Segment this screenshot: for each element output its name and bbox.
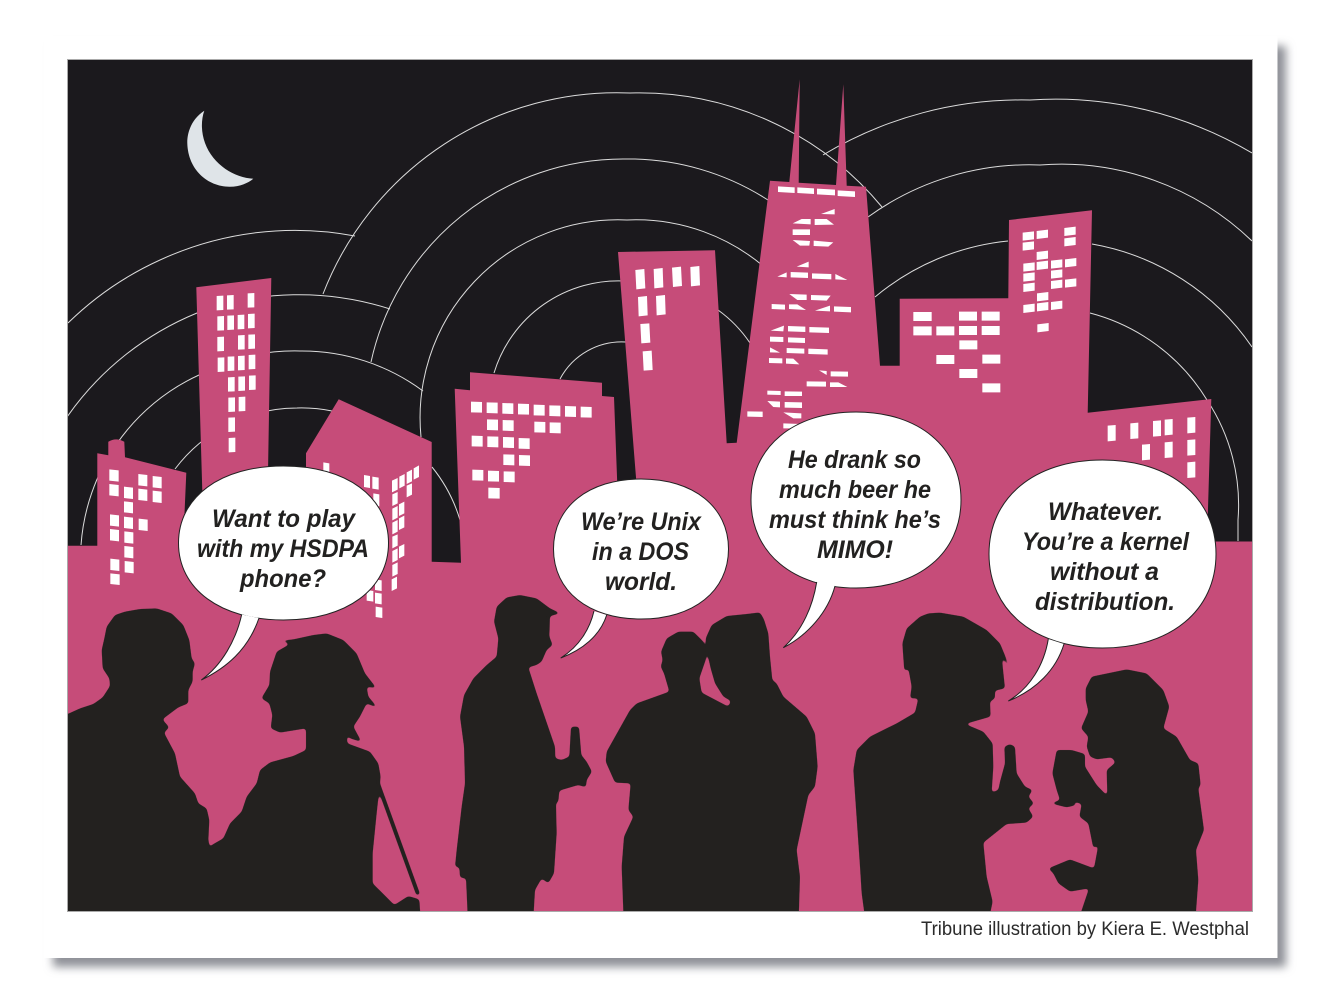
speech bubble: kernel: without a xyxy=(1050,558,1159,586)
silhouettes: two men xyxy=(606,612,818,930)
moon xyxy=(187,111,253,187)
speech bubble: MIMO: much beer he xyxy=(779,476,931,504)
windows: right buildings xyxy=(913,227,1195,478)
speech bubble: MIMO: MIMO! xyxy=(817,536,893,564)
speech bubble: HSDPA: Want to play xyxy=(212,505,356,533)
speech bubble: kernel xyxy=(989,460,1216,701)
speech bubble: HSDPA xyxy=(178,466,388,680)
speech bubble: HSDPA: with my HSDPA xyxy=(197,535,369,563)
skyline xyxy=(68,79,1252,911)
credit line: Tribune illustration by Kiera E. Westphal xyxy=(921,919,1249,940)
speech bubble: Unix: We’re Unix xyxy=(581,508,702,536)
windows: left buildings xyxy=(109,293,419,618)
speech bubble: MIMO: must think he’s xyxy=(769,506,941,534)
speech bubble: MIMO xyxy=(751,412,961,648)
speech bubble: kernel: distribution. xyxy=(1035,588,1175,616)
speech bubble: Unix: world. xyxy=(605,568,677,596)
silhouettes: left couple xyxy=(53,608,421,930)
people silhouettes xyxy=(53,595,1204,930)
silhouettes: right couple xyxy=(853,613,1204,930)
speech bubble: Unix: in a DOS xyxy=(592,538,689,566)
night sky panel xyxy=(68,60,1252,912)
windows: center buildings xyxy=(471,186,855,499)
silhouette: man with bottle xyxy=(455,595,592,930)
speech bubble: MIMO: He drank so xyxy=(788,446,921,474)
signal arcs xyxy=(67,93,1252,545)
speech bubble: Unix xyxy=(554,479,728,658)
speech bubble: HSDPA: phone? xyxy=(239,565,326,593)
speech bubble: kernel: Whatever. xyxy=(1048,498,1163,526)
speech bubble: kernel: You’re a kernel xyxy=(1022,528,1190,556)
